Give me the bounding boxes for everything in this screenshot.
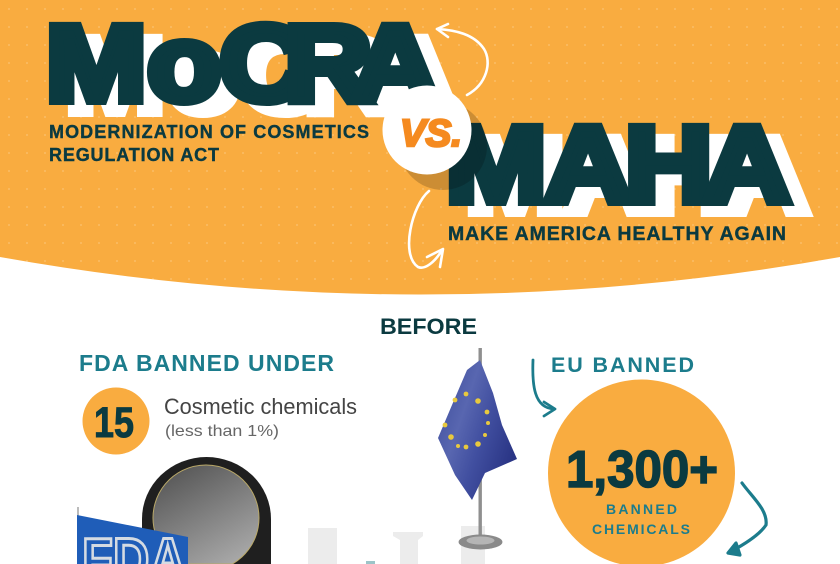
text: cosmetic chemicals: Cosmetic chemicals	[164, 394, 357, 419]
heading: before: BEFORE	[380, 314, 477, 339]
image: FDA flag	[77, 507, 188, 564]
text: cosmetic chemicals	[164, 394, 357, 440]
title: MAHA: MAHA	[465, 115, 810, 236]
text: cosmetic chemicals: (less than 1%)	[165, 423, 279, 440]
heading: EU banned: EU BANNED	[551, 353, 694, 377]
stat: 15 badge	[82, 388, 150, 454]
subtitle: Modernization of Cosmetics Regulation Act: REGULATION ACT	[49, 145, 219, 165]
subtitle: Modernization of Cosmetics Regulation Act: MODERNIZATION OF COSMETICS	[49, 122, 369, 142]
arrow: white top curved	[437, 24, 488, 95]
title: MoCRA: MoCRA	[65, 15, 458, 136]
stat: 1,300+ banned chemicals circle: BANNED	[606, 501, 677, 517]
stat: 15 badge: 15	[94, 399, 134, 447]
image: cosmetic compact	[142, 457, 271, 564]
title: MoCRA: MoCRA	[46, 3, 439, 124]
vs. badge	[382, 86, 487, 190]
stat: 1,300+ banned chemicals circle: 1,300+	[566, 441, 718, 499]
image: lab glassware	[308, 526, 485, 564]
arrow: teal to EU circle	[533, 360, 555, 416]
title: MAHA: MAHA	[446, 104, 791, 225]
vs. badge: VS.	[400, 113, 462, 155]
arrow: white bottom curved	[409, 191, 443, 268]
stat: 1,300+ banned chemicals circle: CHEMICALS	[592, 521, 690, 537]
subtitle: Make America Healthy Again: MAKE AMERICA HEALTHY AGAIN	[448, 223, 786, 245]
header band	[0, 0, 840, 294]
stat: 1,300+ banned chemicals circle	[548, 380, 735, 564]
subtitle: Modernization of Cosmetics Regulation Act	[49, 122, 369, 165]
image: EU flag	[438, 348, 517, 550]
arrow: teal from EU circle	[728, 483, 766, 555]
heading: FDA banned under: FDA BANNED UNDER	[79, 350, 334, 376]
